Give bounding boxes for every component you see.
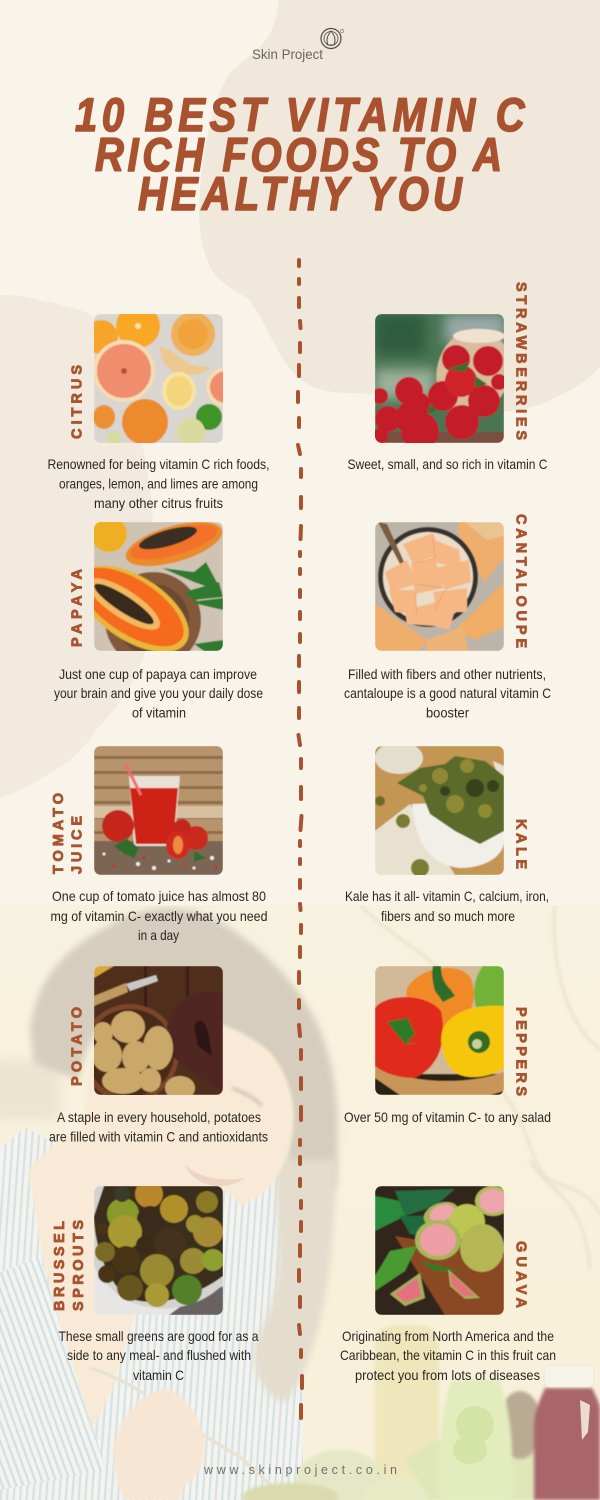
red juice bottle — [534, 1388, 600, 1500]
panel: strawberries — [348, 282, 548, 472]
description: brussel sprouts: vitamin C — [133, 1367, 184, 1383]
label: papaya: PAPAYA — [70, 568, 86, 647]
background photo: woman eating and juice bottles — [0, 905, 600, 1500]
photo: papaya — [94, 522, 223, 651]
logo mark — [321, 28, 344, 48]
title: RICH FOODS TO A — [95, 130, 502, 182]
footer url: www.skinproject.co.in — [203, 1463, 397, 1477]
label: guava: GUAVA — [512, 1241, 528, 1309]
description: papaya: Just one cup of papaya can improve — [59, 666, 257, 682]
photo: strawberries — [375, 314, 504, 443]
description: guava: protect you from lots of diseases — [355, 1367, 540, 1383]
background blob: top right — [199, 0, 600, 412]
photo: cantaloupe — [375, 522, 504, 651]
description: tomato juice: One cup of tomato juice has almost 80 — [52, 888, 266, 904]
description: papaya: of vitamin — [132, 704, 186, 720]
description: citrus: oranges, lemon, and limes are among — [59, 476, 258, 492]
description: potato: A staple in every household, potatoes — [57, 1109, 261, 1125]
description: guava: Caribbean, the vitamin C in this fruit can — [340, 1347, 556, 1363]
photo: peppers — [375, 966, 504, 1095]
dark fruit behind bottles — [504, 1389, 538, 1460]
panel: brussel sprouts — [52, 1180, 259, 1383]
description: citrus: Renowned for being vitamin C rich foods, — [48, 456, 270, 472]
photo: brussel sprouts — [94, 1186, 223, 1315]
label: brussel sprouts: BRUSSEL — [52, 1221, 68, 1311]
photo: tomato juice — [94, 746, 223, 875]
photo: citrus — [94, 314, 223, 443]
description: kale: Kale has it all- vitamin C, calcium, iron, — [345, 888, 549, 904]
woman: shirt — [0, 1128, 303, 1500]
panel: kale — [345, 742, 549, 924]
background blob: left — [0, 295, 153, 798]
label: kale: KALE — [512, 819, 528, 869]
label: brussel sprouts: SPROUTS — [71, 1220, 87, 1311]
panel: cantaloupe — [344, 514, 551, 720]
label: tomato juice: JUICE — [70, 816, 86, 874]
description: brussel sprouts — [58, 1328, 259, 1383]
apples — [295, 1450, 385, 1500]
description: brussel sprouts: side to any meal- and flushed with — [67, 1347, 251, 1363]
description: papaya: your brain and give you your daily dose — [54, 685, 263, 701]
description: cantaloupe: Filled with fibers and other nutrients, — [348, 666, 546, 682]
panel: peppers — [344, 966, 551, 1125]
description: citrus — [48, 456, 270, 511]
description: potato: are filled with vitamin C and antioxidants — [49, 1128, 268, 1144]
label: brussel sprouts — [52, 1220, 87, 1311]
title: HEALTHY YOU — [138, 169, 463, 221]
title: 10 BEST VITAMIN C — [75, 90, 525, 142]
woman: hand and fork — [90, 1368, 287, 1500]
photo: kale — [375, 746, 504, 875]
woman: hair — [30, 908, 338, 1190]
panel: guava — [340, 1186, 556, 1383]
dashed divider — [298, 260, 302, 1418]
description: tomato juice — [50, 888, 268, 943]
yellow juice bottle — [375, 1325, 439, 1485]
label: citrus: CITRUS — [70, 365, 86, 439]
description: potato — [49, 1109, 268, 1144]
description: tomato juice: mg of vitamin C- exactly what you need — [50, 908, 268, 924]
branches — [360, 905, 600, 1270]
description: cantaloupe: cantaloupe is a good natural vitamin C — [344, 685, 551, 701]
panel: citrus — [48, 304, 270, 511]
label: strawberries: STRAWBERRIES — [512, 282, 528, 440]
panel: potato — [49, 966, 268, 1144]
description: cantaloupe — [344, 666, 551, 720]
panel: papaya — [54, 513, 263, 720]
logo wordmark: Skin Project — [252, 46, 323, 62]
photo: potato — [94, 966, 223, 1095]
description: kale — [345, 888, 549, 924]
label: tomato juice: TOMATO — [51, 793, 67, 874]
woman: face and neck — [28, 1013, 294, 1430]
label: potato: POTATO — [70, 1007, 86, 1086]
description: peppers: Over 50 mg of vitamin C- to any salad — [344, 1109, 551, 1125]
logo — [252, 28, 344, 62]
lettuce — [405, 1440, 535, 1500]
woman: shirt collar — [0, 1258, 106, 1490]
description: kale: fibers and so much more — [381, 908, 515, 924]
title — [75, 90, 525, 221]
label: peppers: PEPPERS — [512, 1007, 528, 1096]
description: guava — [340, 1328, 556, 1383]
description: citrus: many other citrus fruits — [94, 495, 223, 511]
description: brussel sprouts: These small greens are good for as a — [58, 1328, 259, 1344]
description: tomato juice: in a day — [138, 927, 179, 943]
description: cantaloupe: booster — [426, 704, 469, 720]
label: cantaloupe: CANTALOUPE — [512, 514, 528, 648]
description: guava: Originating from North America and the — [342, 1328, 554, 1344]
label: tomato juice — [51, 793, 86, 874]
description: strawberries: Sweet, small, and so rich in vitamin C — [348, 456, 548, 472]
panel: tomato juice — [50, 746, 268, 943]
woman: lower hair strand — [254, 1160, 336, 1403]
green cucumber bottle — [440, 1379, 514, 1458]
description: papaya — [54, 666, 263, 720]
tomato salad — [242, 1483, 338, 1500]
photo: guava — [375, 1186, 504, 1315]
